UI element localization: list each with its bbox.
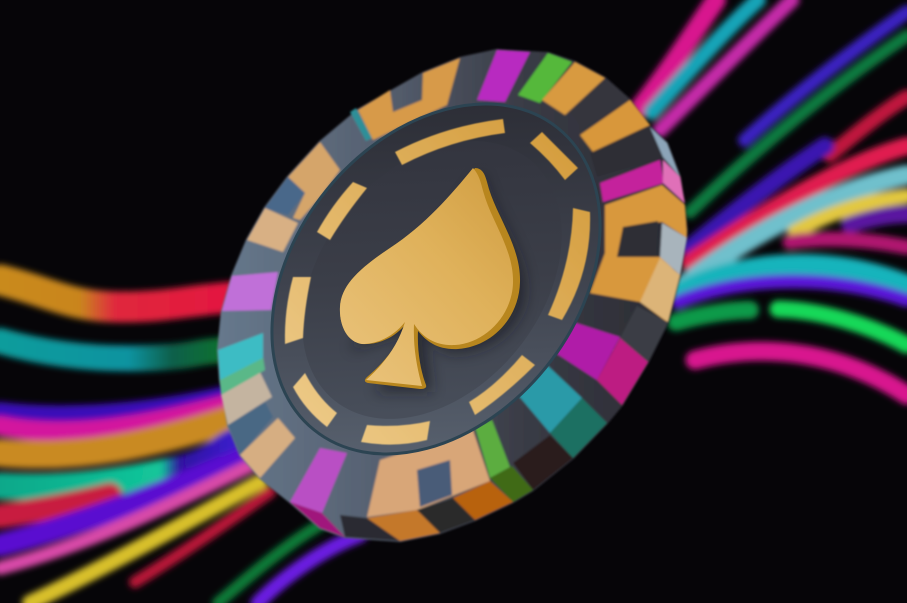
rim segments: top left (358, 58, 460, 140)
stream: violet (0, 396, 225, 415)
inner gold arcs (285, 119, 590, 445)
stream: gold to red (0, 280, 235, 307)
stream: red (0, 495, 110, 516)
stream: yellow (795, 196, 907, 232)
rim segments: bottom left (290, 448, 347, 513)
chip face (204, 39, 668, 519)
stream: red lower (135, 492, 270, 582)
stream: yellow (30, 482, 260, 603)
spade icon (340, 168, 520, 389)
stream: blue (745, 12, 907, 140)
stream: green (690, 36, 907, 212)
rim segments: lower right (554, 322, 620, 380)
spade shadow (350, 175, 525, 392)
stream: pale cyan (680, 175, 907, 288)
stream: violet right (850, 214, 907, 224)
stream: red upper (830, 97, 907, 155)
rim segments: right gold block (590, 185, 687, 322)
rim segments: bottom (367, 430, 490, 517)
poker chip (204, 39, 687, 541)
stream: purple (0, 458, 245, 545)
chip rim (218, 50, 687, 541)
stream: teal green to indigo (0, 440, 240, 487)
stream: cyan top (652, 0, 758, 112)
stream: magenta lower (695, 351, 907, 395)
light streams: right (640, 0, 907, 395)
stream: pink (0, 466, 250, 568)
stream: pink top (640, 0, 716, 108)
stream: green soft (676, 310, 750, 322)
stream: magenta top (660, 0, 792, 130)
stream: teal (680, 265, 907, 292)
stream: teal to green (0, 341, 225, 358)
stream: magenta right (790, 239, 907, 247)
stream: purple right (678, 281, 907, 302)
stream: red mid (690, 146, 907, 262)
stream: violet lower (258, 535, 360, 603)
rim segments: top right (477, 50, 530, 102)
stream: purple mid (690, 146, 825, 248)
stream: amber (0, 420, 230, 455)
stream: green lower (218, 525, 320, 603)
stream: magenta (0, 405, 225, 431)
stream: bright green (778, 309, 907, 345)
light streams: left (0, 280, 360, 603)
inner disc (249, 90, 615, 470)
